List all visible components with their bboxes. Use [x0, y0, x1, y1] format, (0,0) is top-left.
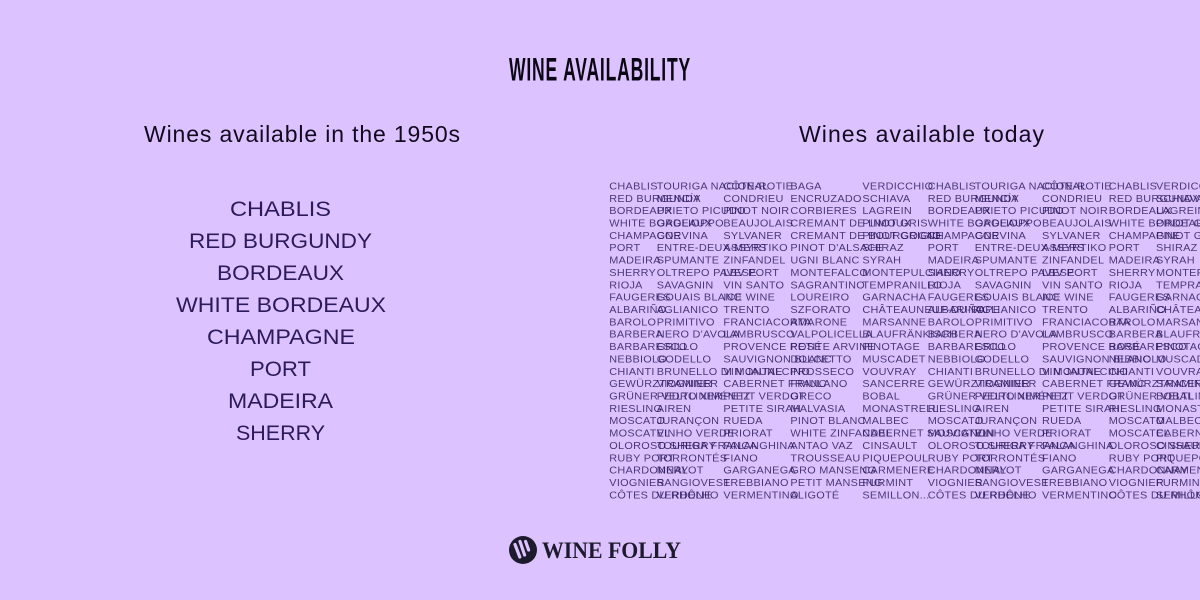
column 2: NERO D'AVOLA [657, 330, 740, 341]
column 5: MONTEPULCIANO [862, 268, 961, 279]
column 8: TREBBIANO [1042, 478, 1107, 489]
column 2: SANGIOVESE [657, 478, 731, 489]
column 9: RED BURGUNDY [1109, 194, 1200, 205]
column 7: MERLOT [975, 466, 1022, 477]
column 1: GRÜNER VELTLINER [609, 391, 722, 402]
wordmark: WINE FOLLY [542, 538, 681, 563]
column 5: LAGREIN [862, 206, 912, 217]
column 9: SHERRY [1109, 268, 1155, 279]
column 8: CONDRIEU [1042, 194, 1102, 205]
column 1: OLOROSO SHERRY [609, 441, 716, 452]
column 6: MOSCATO [928, 417, 984, 427]
column 2: VINHO VERDE [657, 429, 735, 439]
column 9: BAROLO [1109, 318, 1156, 328]
column 4: LOUREIRO [790, 293, 849, 304]
column 4: PETITE ARVINE [790, 342, 875, 353]
column 6: WHITE BORDEAUX [928, 219, 1031, 229]
column 7: PRIETO PICUDO [975, 206, 1064, 217]
column 6: CHABLIS [928, 182, 976, 192]
column 5: CHÂTEAUNEUF-DU-PAPE [862, 303, 1000, 316]
column 6: BARBERA [928, 330, 982, 341]
column 5: SEMILLON... [862, 491, 929, 501]
column 6: RIOJA [928, 281, 961, 291]
column 9: CHABLIS [1109, 182, 1157, 192]
column 9: RUBY PORT [1109, 454, 1175, 464]
column 7: TOURIGA FRANCA [975, 441, 1075, 452]
column 6: CHAMPAGNE [928, 231, 999, 242]
column 8: LAMBRUSCO [1042, 330, 1113, 341]
column 5: VERDICCHIO [862, 182, 933, 192]
column 1: MOSCATEL [609, 429, 671, 439]
column 5: MUSCADET [862, 355, 926, 365]
column 3: CÔTE-ROTIE [723, 180, 793, 192]
column 2: AGLIANICO [657, 305, 718, 316]
column 1: CHAMPAGNE [609, 231, 681, 242]
column 9: RIOJA [1109, 281, 1142, 291]
column 9: CHIANTI [1109, 367, 1154, 378]
column 9: MOSCATEL [1109, 429, 1170, 439]
column 4: VALPOLICELLA [790, 330, 873, 341]
column 3: PROVENCE ROSÉ [723, 341, 822, 353]
column 9: BORDEAUX [1109, 206, 1172, 217]
column 2: PRIMITIVO [657, 318, 715, 328]
column 3: FIANO [723, 454, 758, 464]
column 5: PINOTAGE [862, 342, 920, 353]
column 3: PETITE SIRAH [723, 404, 801, 415]
column 4: DOLCETTO [790, 355, 852, 365]
column 7: MENCÍA [975, 192, 1019, 205]
column 8: PRIORAT [1042, 429, 1092, 439]
title: WINE AVAILABILITY [509, 52, 691, 88]
column 7: GOUAIS BLANC [975, 293, 1060, 304]
column 9: PORT [1109, 244, 1140, 254]
icon: wine bottles in circle [509, 536, 537, 564]
column 3: GARGANEGA [723, 466, 796, 477]
column 3: TREBBIANO [723, 478, 789, 489]
column 1: BAROLO [609, 318, 656, 328]
column 4: CREMANT DE BOURGOGNE [790, 231, 943, 242]
column 3: SAUVIGNON BLANC [723, 355, 832, 365]
column 7: JURANÇON [975, 417, 1037, 427]
column 2: GRILLO [657, 342, 698, 353]
column 4: MALVASIA [790, 404, 845, 415]
column 7: BRUNELLO DI MONTALCINO [975, 367, 1128, 378]
column 5: PIQUEPOUL [862, 454, 928, 464]
column 1: PORT [609, 244, 641, 254]
column 1: FAUGERES [609, 293, 671, 304]
column 3: TRENTO [723, 305, 770, 316]
heading: wines available in the 1950s: Wines available in the 1950s [144, 121, 460, 147]
column 9: CHARDONNAY [1109, 466, 1188, 477]
column 5: SHIRAZ [862, 244, 904, 254]
column 8: SAUVIGNON BLANC [1042, 355, 1151, 365]
column 5: SYRAH [862, 256, 901, 266]
column 3: FALANGHINA [723, 441, 795, 452]
column 4: TROUSSEAU [790, 454, 861, 464]
column 3: PRIORAT [723, 429, 773, 439]
column 10: SYRAH [1156, 256, 1195, 266]
column 1: CÔTES DU RHÔNE [609, 489, 712, 501]
column 3: RUEDA [723, 417, 763, 427]
column 2: JURANÇON [657, 417, 719, 427]
column 6: RED BURGUNDY [928, 194, 1019, 205]
column 4: SZFORATO [790, 305, 851, 316]
column 4: GRO MANSENG [790, 466, 876, 477]
column 3: CABERNET FRANC [723, 380, 827, 390]
logo: wine folly [509, 536, 681, 564]
column 7: SAVAGNIN [975, 281, 1031, 291]
column 8: VIN JAUNE [1042, 367, 1101, 378]
column 4: FRIULANO [790, 380, 848, 390]
column 10: BOBAL [1156, 392, 1194, 402]
column 7: OLTREPO PAVESE [975, 268, 1075, 279]
column 7: TORRONTÉS [975, 452, 1045, 464]
column 5: BOBAL [862, 392, 900, 402]
column 2: TOURIGA FRANCA [657, 441, 757, 452]
column 1: GEWÜRZTRAMINER [609, 379, 718, 390]
column 1: CHABLIS [609, 182, 658, 192]
column 8: PINOT NOIR [1042, 206, 1108, 217]
column 3: FRANCIACORTA [723, 318, 811, 328]
column 1: CHARDONNAY [609, 466, 689, 477]
column 6: CHARDONNAY [928, 466, 1007, 477]
column 8: ICE WINE [1042, 293, 1094, 304]
column 6: BORDEAUX [928, 206, 991, 217]
column 1: NEBBIOLO [609, 355, 667, 365]
column 9: RIESLING [1109, 404, 1162, 415]
column 3: VIN JAUNE [723, 367, 783, 378]
column 4: CREMANT DE LIMOUX [790, 219, 911, 229]
column 7: ENTRE-DEUX-MERS [975, 244, 1085, 254]
column 7: VERDELHO [975, 491, 1037, 501]
column 8: PETIT VERDOT [1042, 392, 1125, 402]
column 1: ALBARIÑO [609, 303, 667, 316]
column 9: VIOGNIER [1109, 478, 1164, 489]
column 1: RIESLING [609, 404, 662, 415]
list: wines of the 1950s: RED BURGUNDY [189, 230, 372, 253]
column 6: VIOGNIER [928, 478, 983, 489]
column 8: GARGANEGA [1042, 466, 1115, 477]
column 2: GAGLIOPPO [657, 219, 724, 229]
list: wines of the 1950s: PORT [250, 358, 311, 381]
column 2: VIOGNIER [657, 380, 712, 390]
column 4: GRECO [790, 392, 832, 402]
column 3: SYLVANER [723, 231, 782, 242]
column 8: RUEDA [1042, 417, 1081, 427]
column 3: CONDRIEU [723, 194, 784, 205]
column 7: PRIMITIVO [975, 318, 1033, 328]
column 1: VIOGNIER [609, 478, 665, 489]
column 3: VIN SANTO [723, 281, 784, 291]
column 1: BARBERA [609, 330, 663, 341]
column 7: AGLIANICO [975, 305, 1036, 316]
column 7: GRILLO [975, 342, 1016, 353]
list: wines of the 1950s: BORDEAUX [217, 262, 344, 285]
column 2: MENCÍA [657, 192, 701, 205]
column 1: RIOJA [609, 281, 643, 291]
column 9: BARBERA [1109, 330, 1163, 341]
column 8: PROVENCE ROSÉ [1042, 341, 1140, 353]
column 5: BLAUFRÄNKISCH [862, 329, 957, 341]
list: wines of the 1950s: SHERRY [236, 422, 325, 445]
column 2: TORRONTÉS [657, 452, 727, 464]
column 4: AMARONE [790, 318, 847, 328]
list: wines of the 1950s: CHAMPAGNE [207, 326, 355, 349]
column 1: SHERRY [609, 268, 656, 279]
column 7: AIREN [975, 404, 1009, 415]
column 5: SCHIAVA [862, 194, 910, 205]
column 1: WHITE BORDEAUX [609, 219, 712, 229]
column 9: CHAMPAGNE [1109, 231, 1180, 242]
column 8: TRENTO [1042, 305, 1088, 316]
list: wines of the 1950s: MADEIRA [228, 390, 333, 413]
column 2: TOURIGA NACIONAL [657, 182, 768, 192]
column 8: CÔTE-ROTIE [1042, 180, 1112, 192]
column 5: CARMENERE [862, 466, 934, 477]
column 6: SHERRY [928, 268, 974, 279]
column 8: CABERNET FRANC [1042, 380, 1146, 390]
column 9: ALBARIÑO [1109, 303, 1166, 316]
column 4: BAGA [790, 182, 822, 192]
column 6: ALBARIÑO [928, 303, 985, 316]
column 2: PEDRO XIMÉNEZ [657, 390, 751, 402]
list: wines of the 1950s: WHITE BORDEAUX [176, 294, 386, 317]
column 5: MONASTRELL [862, 404, 939, 415]
column 1: MADEIRA [609, 256, 661, 266]
column 7: NERO D'AVOLA [975, 330, 1058, 341]
column 8: VIN SANTO [1042, 281, 1103, 291]
column 2: GOUAIS BLANC [657, 293, 742, 304]
column 8: PETITE SIRAH [1042, 404, 1120, 415]
column 2: SPUMANTE [657, 256, 719, 266]
column 2: CORVINA [657, 231, 708, 242]
column 5: GARNACHA [862, 293, 926, 304]
column 8: FIANO [1042, 454, 1077, 464]
column 6: OLOROSO SHERRY [928, 441, 1035, 452]
column 9: NEBBIOLO [1109, 355, 1167, 365]
column 7: GODELLO [975, 355, 1029, 365]
column 8: FALANGHINA [1042, 441, 1114, 452]
column 8: ZINFANDEL [1042, 256, 1104, 266]
column 8: FRANCIACORTA [1042, 318, 1130, 328]
column 5: CABERNET SAUVIGNON [862, 429, 995, 439]
column 3: LAMBRUSCO [723, 330, 795, 341]
column 1: BORDEAUX [609, 206, 673, 217]
column 5: SANCERRE [862, 380, 925, 390]
column 7: CORVINA [975, 231, 1026, 242]
column 6: RIESLING [928, 404, 981, 415]
column 9: BARBARESCO [1109, 342, 1187, 353]
column 2: ENTRE-DEUX-MERS [657, 244, 767, 254]
column 3: PINOT NOIR [723, 206, 790, 217]
column 6: RUBY PORT [928, 454, 994, 464]
column 5: FURMINT [862, 478, 914, 489]
column 5: TEMPRANILLO [862, 281, 942, 291]
column 3: BEAUJOLAIS [723, 219, 793, 229]
column 6: GEWÜRZTRAMINER [928, 379, 1037, 390]
column 8: VERMENTINO [1042, 491, 1117, 501]
column 2: OLTREPO PAVESE [657, 268, 757, 279]
column 6: GRÜNER VELTLINER [928, 391, 1041, 402]
column 4: MONTEFALCO [790, 268, 868, 279]
column 6: PORT [928, 244, 959, 254]
column 6: MADEIRA [928, 256, 979, 266]
column 3: LBV PORT [723, 268, 780, 279]
column 7: VINHO VERDE [975, 429, 1053, 439]
column 7: SPUMANTE [975, 256, 1037, 266]
column 4: PINOT D'ALSACE [790, 244, 883, 254]
column 1: BARBARESCO [609, 342, 688, 353]
column 5: MARSANNE [862, 318, 926, 328]
column 9: MADEIRA [1109, 256, 1160, 266]
column 1: RED BURGUNDY [609, 194, 701, 205]
column 3: PETIT VERDOT [723, 392, 806, 402]
column 10: SHIRAZ [1156, 244, 1198, 254]
column 3: VERMENTINO [723, 491, 799, 501]
column 4: SAGRANTINO [790, 281, 865, 291]
column 5: PINOT GRIS [862, 219, 928, 229]
column 6: CÔTES DU RHÔNE [928, 489, 1030, 501]
column 7: GAGLIOPPO [975, 219, 1042, 229]
heading: wines available today: Wines available today [799, 121, 1044, 147]
column 8: ASSYRTIKO [1042, 244, 1107, 254]
column 6: CHIANTI [928, 367, 973, 378]
column 4: PROSSECO [790, 367, 854, 378]
list: wines of the 1950s: CHABLIS [230, 198, 331, 221]
column 4: UGNI BLANC [790, 256, 860, 266]
column 4: WHITE ZINFANDEL [790, 429, 892, 439]
column 5: PINOT GRIGIO [862, 231, 941, 242]
column 3: ASSYRTIKO [723, 244, 788, 254]
column 6: NEBBIOLO [928, 355, 986, 365]
column 1: MOSCATO [609, 417, 665, 427]
column 2: SAVAGNIN [657, 281, 713, 291]
column 4: ALIGOTÉ [790, 489, 839, 501]
column 7: TOURIGA NACIONAL [975, 182, 1086, 192]
list: wines of the 1950s [176, 198, 386, 445]
wine grid: wines available today [609, 180, 1200, 501]
column 1: RUBY PORT [609, 454, 675, 464]
column 7: PEDRO XIMÉNEZ [975, 390, 1069, 402]
column 4: PETIT MANSENG [790, 478, 883, 489]
column 6: FAUGERES [928, 293, 989, 304]
column 7: VIOGNIER [975, 380, 1030, 390]
column 1: CHIANTI [609, 367, 655, 378]
column 9: FAUGERES [1109, 293, 1170, 304]
column 2: GODELLO [657, 355, 711, 365]
column 4: ENCRUZADO [790, 194, 862, 205]
column 2: AIREN [657, 404, 691, 415]
column 6: BAROLO [928, 318, 975, 328]
column 2: MERLOT [657, 466, 704, 477]
column 2: PRIETO PICUDO [657, 206, 746, 217]
column 6: MOSCATEL [928, 429, 989, 439]
column 2: VERDELHO [657, 491, 719, 501]
column 6: BARBARESCO [928, 342, 1006, 353]
column 5: MALBEC [862, 417, 909, 427]
column 2: BRUNELLO DI MONTALCINO [657, 367, 810, 378]
column 3: ZINFANDEL [723, 256, 786, 266]
column 4: PINOT BLANC [790, 417, 866, 427]
column 8: SYLVANER [1042, 231, 1101, 242]
column 4: ANTAO VAZ [790, 441, 853, 452]
column 5: CINSAULT [862, 441, 918, 452]
column 5: VOUVRAY [862, 367, 917, 378]
column 7: SANGIOVESE [975, 478, 1049, 489]
column 4: CORBIERES [790, 206, 857, 217]
column 8: BEAUJOLAIS [1042, 219, 1112, 229]
column 8: LBV PORT [1042, 268, 1098, 279]
column 9: MOSCATO [1109, 417, 1165, 427]
column 3: ICE WINE [723, 293, 775, 304]
